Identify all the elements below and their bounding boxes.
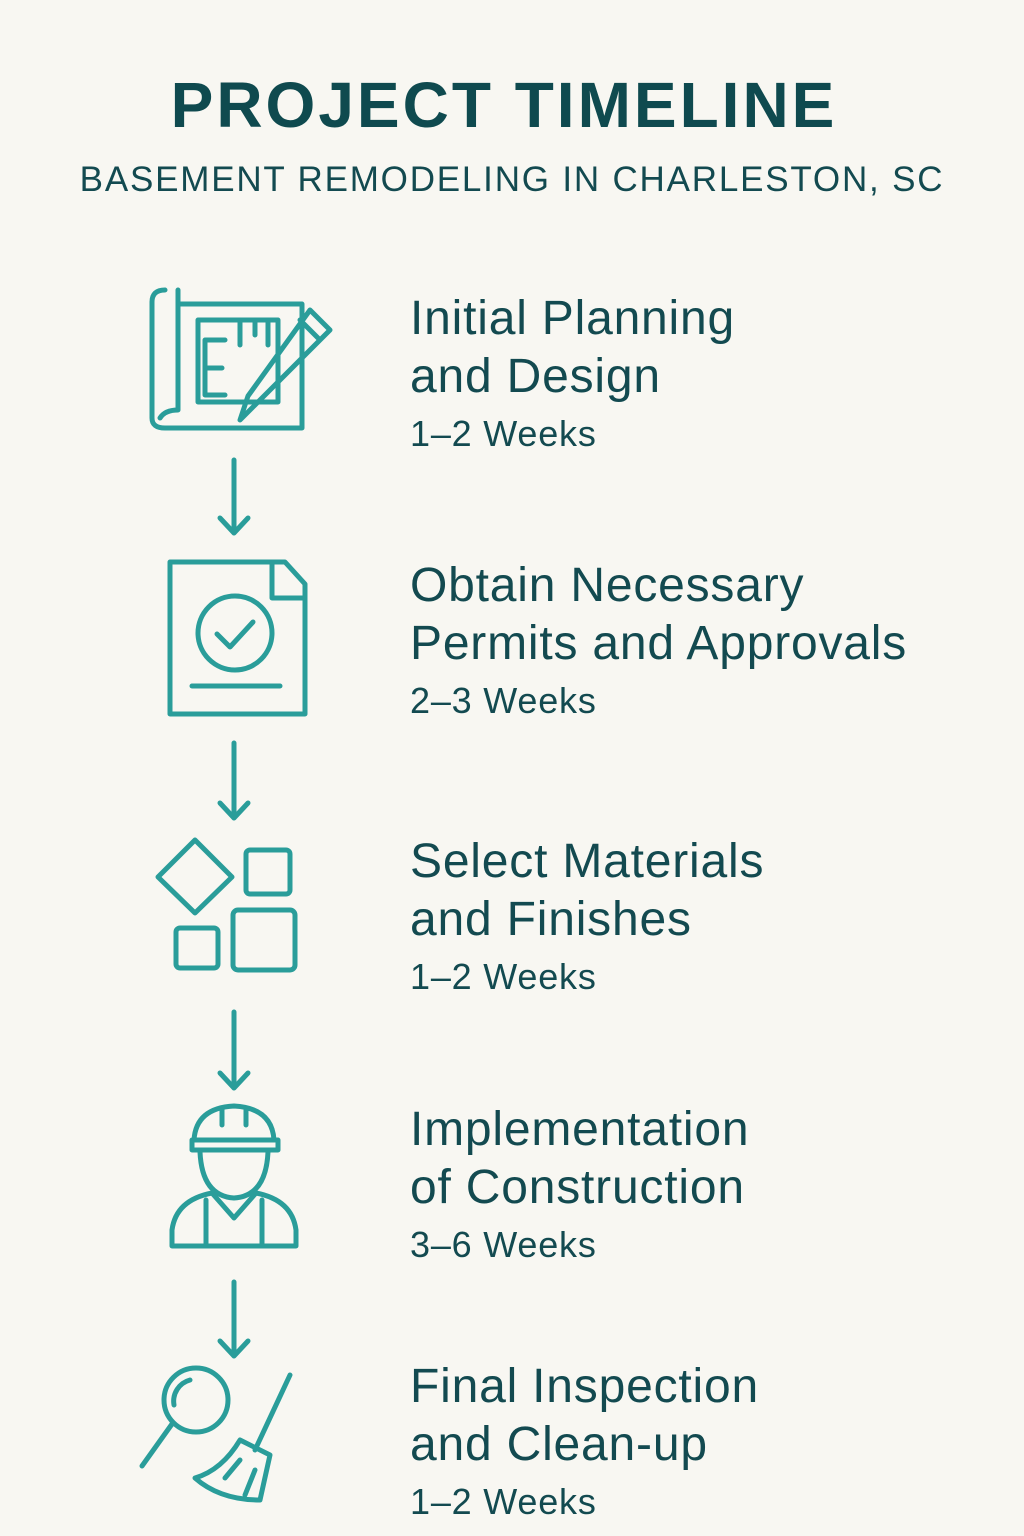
step 3 text: and Finishes — [410, 893, 692, 946]
step 4 text: of Construction — [410, 1161, 745, 1214]
step 4 text — [410, 1103, 749, 1265]
subtitle: BASEMENT REMODELING IN CHARLESTON, SC — [80, 160, 944, 199]
step 1 text — [410, 292, 735, 454]
step 2 text: 2–3 Weeks — [410, 680, 597, 721]
step 3 text: Select Materials — [410, 835, 764, 888]
step 4 text: 3–6 Weeks — [410, 1224, 597, 1265]
step 1 text: Initial Planning — [410, 292, 735, 345]
arrow 4 — [220, 1282, 248, 1356]
step 1 text: 1–2 Weeks — [410, 413, 597, 454]
title: PROJECT TIMELINE — [171, 69, 837, 141]
step 5 text: and Clean-up — [410, 1418, 708, 1471]
step 3 text — [410, 835, 764, 997]
icon: permit document — [170, 562, 305, 714]
step 5 text — [410, 1360, 759, 1522]
icon: blueprint — [152, 290, 330, 428]
step 2 text: Obtain Necessary — [410, 559, 804, 612]
step 2 text — [410, 559, 907, 721]
icon: magnifier and broom — [142, 1368, 290, 1500]
icon: materials — [158, 840, 295, 970]
step 2 text: Permits and Approvals — [410, 617, 907, 670]
step 3 text: 1–2 Weeks — [410, 956, 597, 997]
step 5 text: 1–2 Weeks — [410, 1481, 597, 1522]
arrow 2 — [220, 743, 248, 818]
step 1 text: and Design — [410, 350, 661, 403]
arrow 1 — [220, 460, 248, 533]
step 5 text: Final Inspection — [410, 1360, 759, 1413]
arrow 3 — [220, 1012, 248, 1088]
icon: worker — [172, 1106, 296, 1246]
step 4 text: Implementation — [410, 1103, 749, 1156]
